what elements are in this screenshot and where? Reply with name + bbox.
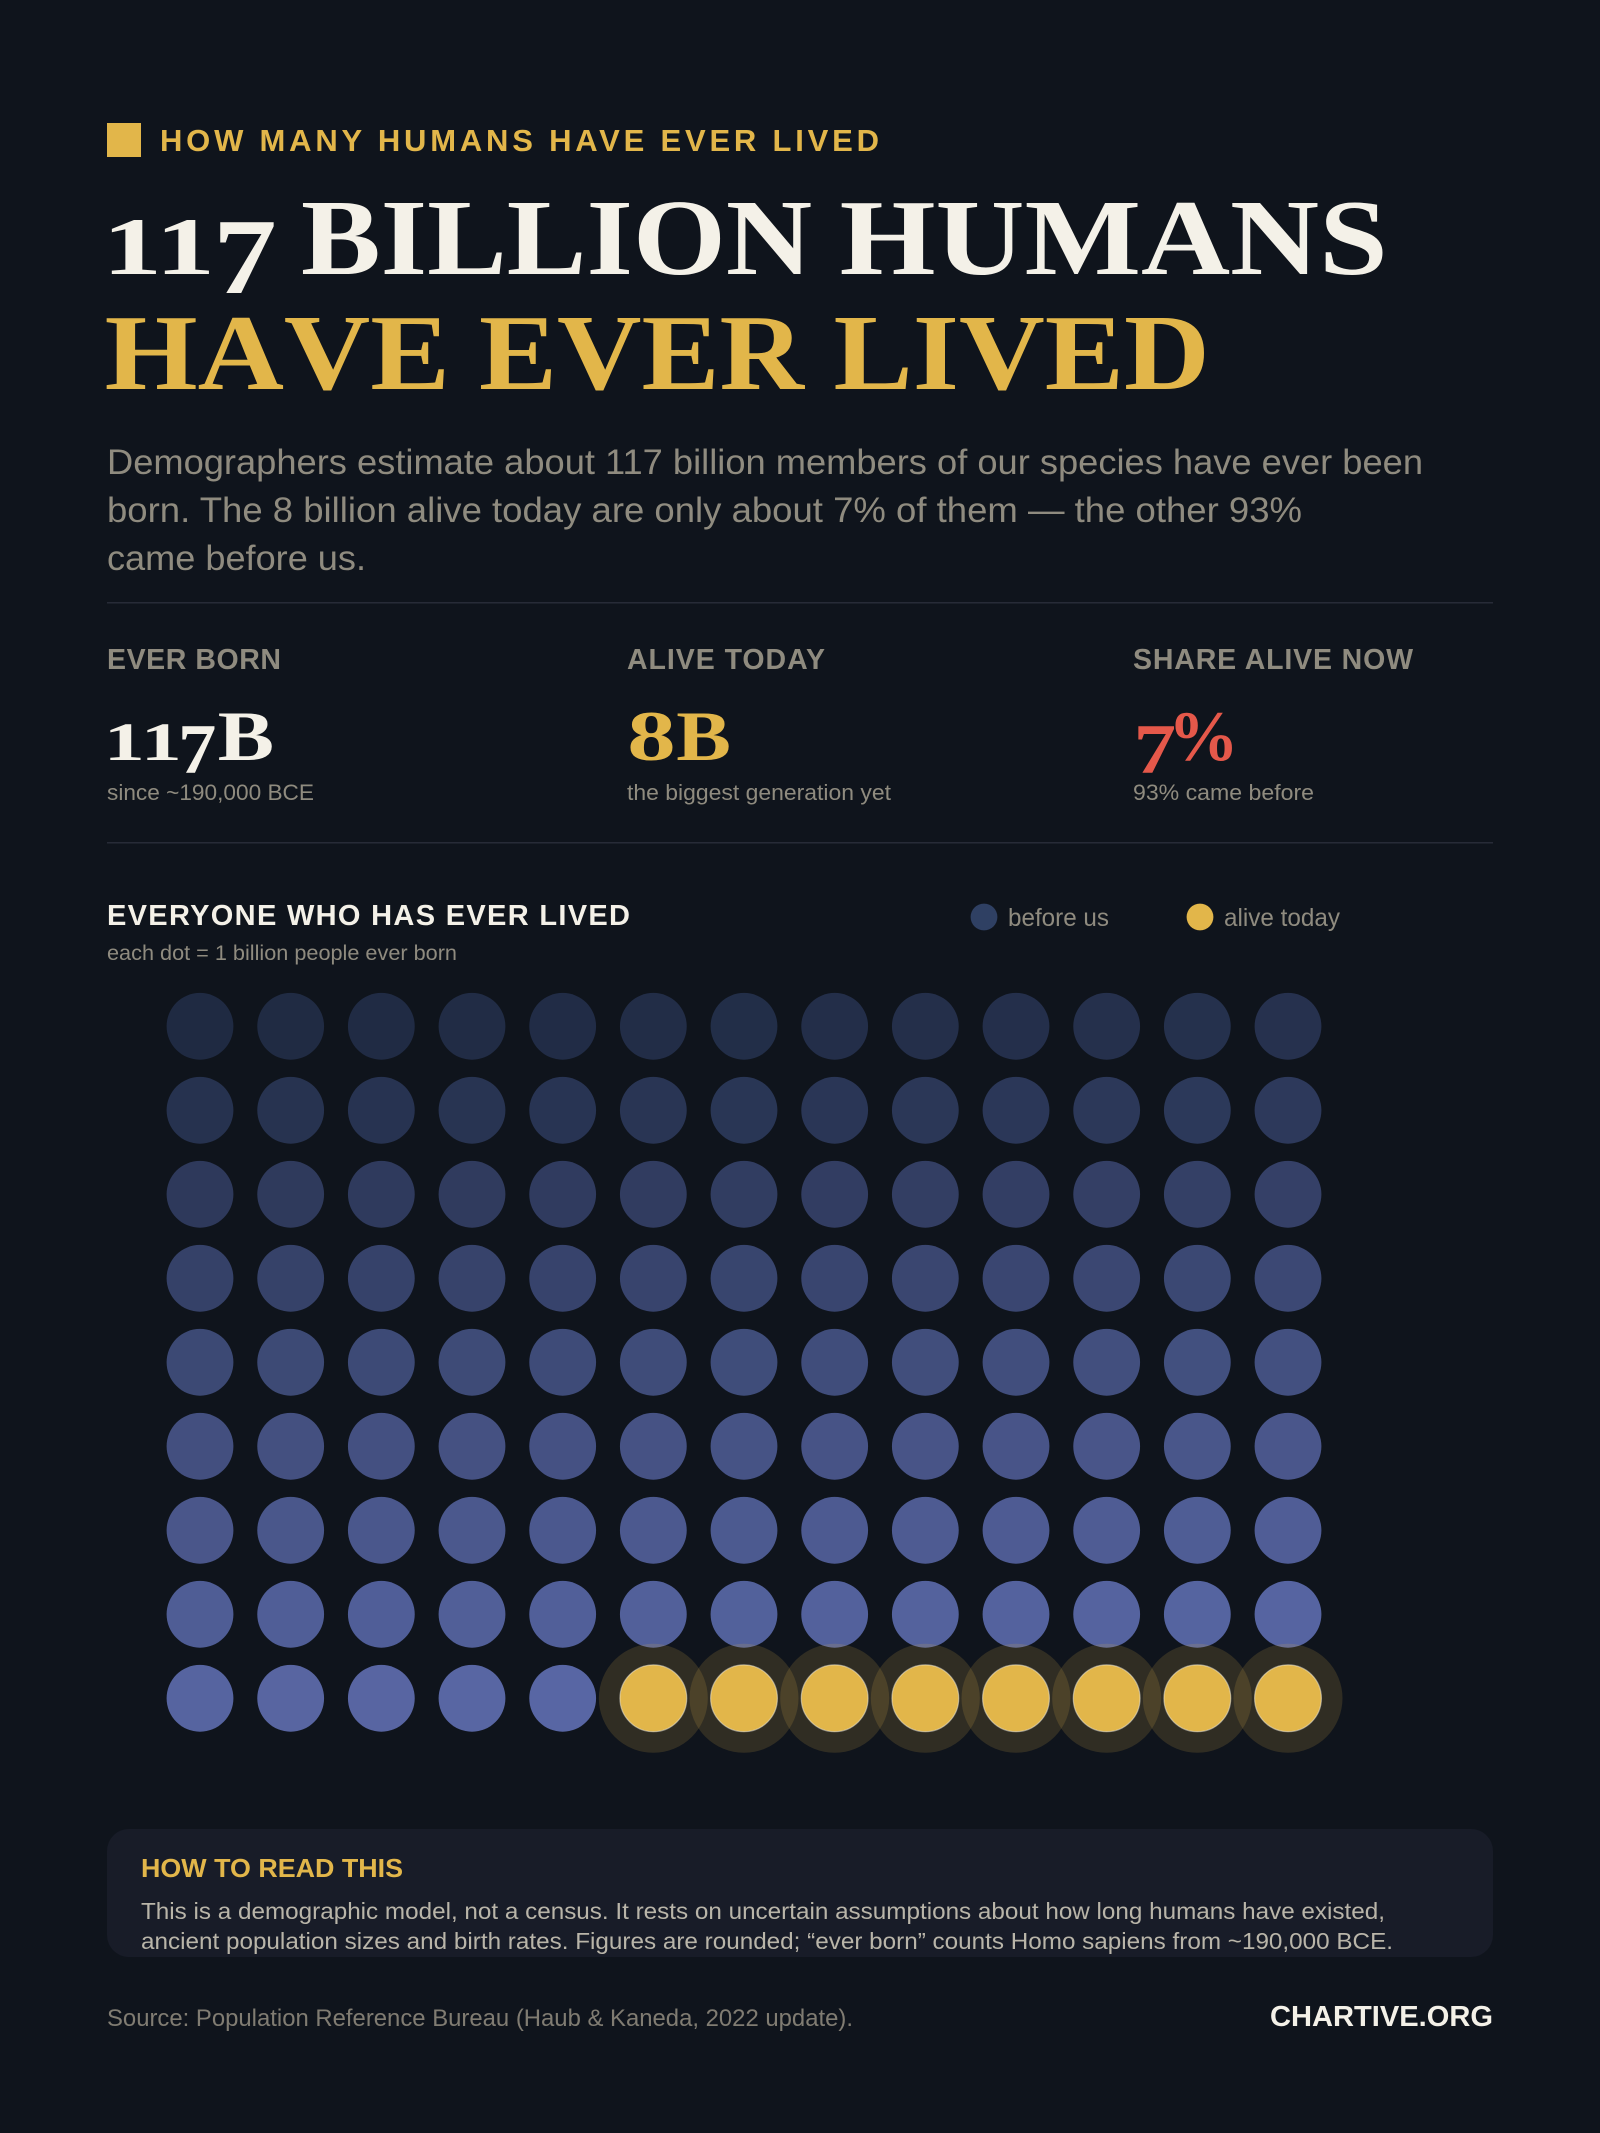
- brand: CHARTIVE.ORG: [1270, 2001, 1493, 2033]
- stat: share alive now: [1133, 644, 1413, 805]
- stat: ever born: EVER BORN: [107, 644, 281, 676]
- title line 1: 1: [155, 202, 215, 292]
- title line 2: HAVE: [105, 292, 450, 413]
- stat: share alive now: SHARE ALIVE NOW: [1133, 644, 1413, 676]
- title line 1: HUMANS: [840, 179, 1388, 298]
- big number 7%: %: [1168, 698, 1239, 776]
- panel body: This is a demographic model, not a census. It rests on uncertain assumptions about how long humans have existed,: [141, 1898, 1385, 1924]
- big number 8B: 8: [627, 697, 676, 776]
- panel heading: HOW TO READ THIS: [141, 1853, 403, 1883]
- big number 117B: 7: [178, 710, 216, 788]
- dot row 7: [167, 1497, 1321, 1564]
- dot row 3: [167, 1161, 1321, 1228]
- chart heading: each dot = 1 billion people ever born: [107, 942, 457, 965]
- kicker text: HOW MANY HUMANS HAVE EVER LIVED: [160, 123, 879, 158]
- icon: gold square: [107, 123, 141, 157]
- panel: how to read this: [107, 1829, 1493, 1957]
- dot chart: 117 dots: [167, 993, 1343, 1753]
- stat: alive today: the biggest generation yet: [627, 780, 891, 805]
- panel body: ancient population sizes and birth rates. Figures are rounded; “ever born” counts Homo sapiens from ~190,000 BCE.: [141, 1928, 1393, 1954]
- big number 117B: [104, 696, 274, 788]
- title line 1: 7: [213, 197, 277, 317]
- big number 8B: [627, 697, 731, 776]
- intro paragraph: Demographers estimate about 117 billion members of our species have ever been: [107, 443, 1423, 482]
- kicker: [107, 123, 879, 158]
- title line 2: EVER: [479, 294, 806, 413]
- stat: ever born: since ~190,000 BCE: [107, 780, 314, 805]
- dot row 2: [167, 1077, 1321, 1144]
- dot row 4: [167, 1245, 1321, 1312]
- big number 7%: [1134, 698, 1239, 788]
- stat: share alive now: 93% came before: [1133, 780, 1314, 805]
- dot row 6: [167, 1413, 1321, 1480]
- dot row 5: [167, 1329, 1321, 1396]
- intro paragraph: came before us.: [107, 539, 366, 578]
- title line 2: LIVED: [834, 293, 1210, 413]
- panel body: [141, 1898, 1393, 1954]
- big number 8B: B: [676, 697, 731, 776]
- title: [102, 178, 1388, 413]
- intro paragraph: born. The 8 billion alive today are only about 7% of them — the other 93%: [107, 491, 1302, 530]
- stat: alive today: ALIVE TODAY: [627, 644, 825, 676]
- source note: Source: Population Reference Bureau (Haub & Kaneda, 2022 update).: [107, 2005, 853, 2032]
- stat: ever born: [104, 644, 314, 805]
- legend: alive today: alive today: [1224, 904, 1340, 932]
- dot row 9: before us: [167, 1665, 596, 1732]
- title line 1: 1: [102, 202, 162, 292]
- legend: before us: before us: [1008, 904, 1109, 932]
- chart heading: [107, 900, 630, 965]
- dot row 8: [167, 1581, 1321, 1648]
- chart heading: EVERYONE WHO HAS EVER LIVED: [107, 900, 630, 932]
- title line 2: [105, 292, 1210, 413]
- legend: [971, 904, 1340, 932]
- big number 117B: B: [218, 696, 274, 775]
- big number 7%: 7: [1134, 710, 1176, 788]
- big number 117B: 1: [141, 713, 182, 772]
- dot row 9: alive today halos: [599, 1644, 1342, 1753]
- dot row 1: [167, 993, 1321, 1060]
- dot row 9: alive today dots: [620, 1665, 1321, 1732]
- title line 1: BILLION: [301, 178, 812, 298]
- intro paragraph: [107, 443, 1423, 578]
- stat: alive today: [627, 644, 891, 805]
- title line 1: [102, 178, 1388, 317]
- big number 117B: 1: [104, 713, 145, 772]
